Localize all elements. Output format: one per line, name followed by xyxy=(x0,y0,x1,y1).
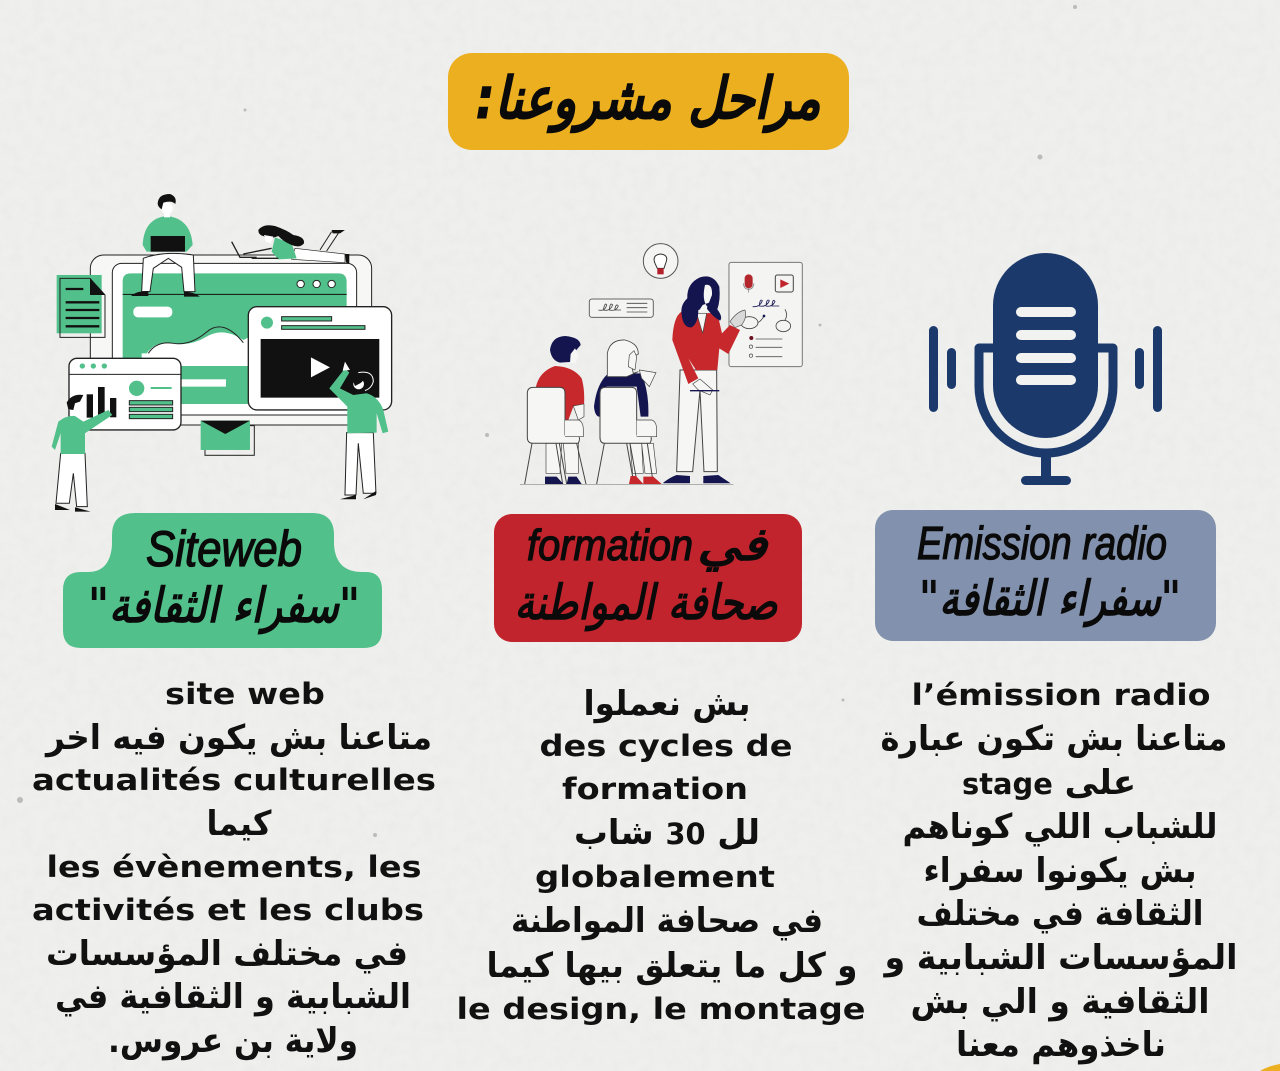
text block: radio description: ناخذوهم معنا xyxy=(956,1025,1166,1065)
label: formation xyxy=(494,514,802,642)
icon: microphone xyxy=(929,253,1162,485)
envelope xyxy=(201,421,254,455)
monitor xyxy=(90,255,372,425)
speech note xyxy=(589,299,653,317)
text block: site web description: الشبابية و الثقافية في xyxy=(55,977,411,1017)
label: site web: "سفراء الثقافة" xyxy=(88,578,360,635)
light bulb badge xyxy=(643,244,678,278)
text block: radio description: l’émission radio xyxy=(912,678,1210,712)
presentation board xyxy=(729,262,802,367)
title xyxy=(448,53,849,150)
document xyxy=(57,275,105,337)
title: مراحل مشروعنا: xyxy=(476,66,821,133)
text block: formation description: le design, le montage xyxy=(456,992,866,1026)
student one xyxy=(525,336,586,484)
text block: site web description: actualités culturelles xyxy=(32,763,436,797)
text block: formation description: formation xyxy=(562,772,748,806)
person right xyxy=(329,362,388,499)
label: site web xyxy=(63,513,382,648)
text block: radio description: بش يكونوا سفراء xyxy=(924,851,1196,891)
label: site web: Siteweb xyxy=(146,521,302,577)
illustration: website team xyxy=(52,194,392,512)
label: emission radio xyxy=(875,510,1216,641)
text block: radio description: متاعنا بش تكون عبارة xyxy=(880,719,1228,759)
text block: formation description: في صحافة المواطنة xyxy=(511,901,823,941)
person with laptop xyxy=(131,194,200,297)
label: formation: في xyxy=(697,517,769,572)
person lying down xyxy=(232,225,349,263)
text block: radio description: للشباب اللي كوناهم xyxy=(902,807,1218,847)
text block: radio description: على stage xyxy=(962,763,1136,803)
teacher xyxy=(663,276,746,483)
text block: radio description xyxy=(880,678,1238,1065)
text block: formation description: globalement xyxy=(535,860,775,894)
text block: formation description: لل 30 شاب xyxy=(574,813,760,853)
label: emission radio: "سفراء الثقافة" xyxy=(919,571,1181,628)
text block: site web description: activités et les clubs xyxy=(32,893,424,927)
text block: radio description: المؤسسات الشبابية و xyxy=(883,938,1238,978)
text block: radio description: الثقافية و الي بش xyxy=(910,982,1210,1022)
illustration: training session xyxy=(520,244,802,484)
text block: site web description: كيما xyxy=(206,804,272,844)
video window xyxy=(248,307,392,410)
text block: formation description: des cycles de xyxy=(540,729,792,763)
text block: site web description: les évènements, les xyxy=(46,850,422,884)
text block: site web description: ولاية بن عروس. xyxy=(108,1021,358,1061)
text block: formation description: و كل ما يتعلق بيها كيما xyxy=(486,946,858,986)
text block: site web description: متاعنا بش يكون فيه اخر xyxy=(44,718,432,758)
text block: radio description: الثقافة في مختلف xyxy=(916,894,1204,934)
label: emission radio: Emission radio xyxy=(917,517,1167,569)
person left xyxy=(52,395,112,512)
text block: site web description xyxy=(32,677,436,1061)
text block: site web description: site web xyxy=(165,677,325,711)
dashboard window xyxy=(69,358,181,430)
label: formation: صحافة المواطنة xyxy=(514,575,779,632)
text block: formation description xyxy=(456,684,866,1026)
student two xyxy=(520,340,733,484)
label: formation: formation xyxy=(527,521,693,570)
text block: site web description: في مختلف المؤسسات xyxy=(46,934,408,974)
text block: formation description: بش نعملوا xyxy=(584,684,750,724)
